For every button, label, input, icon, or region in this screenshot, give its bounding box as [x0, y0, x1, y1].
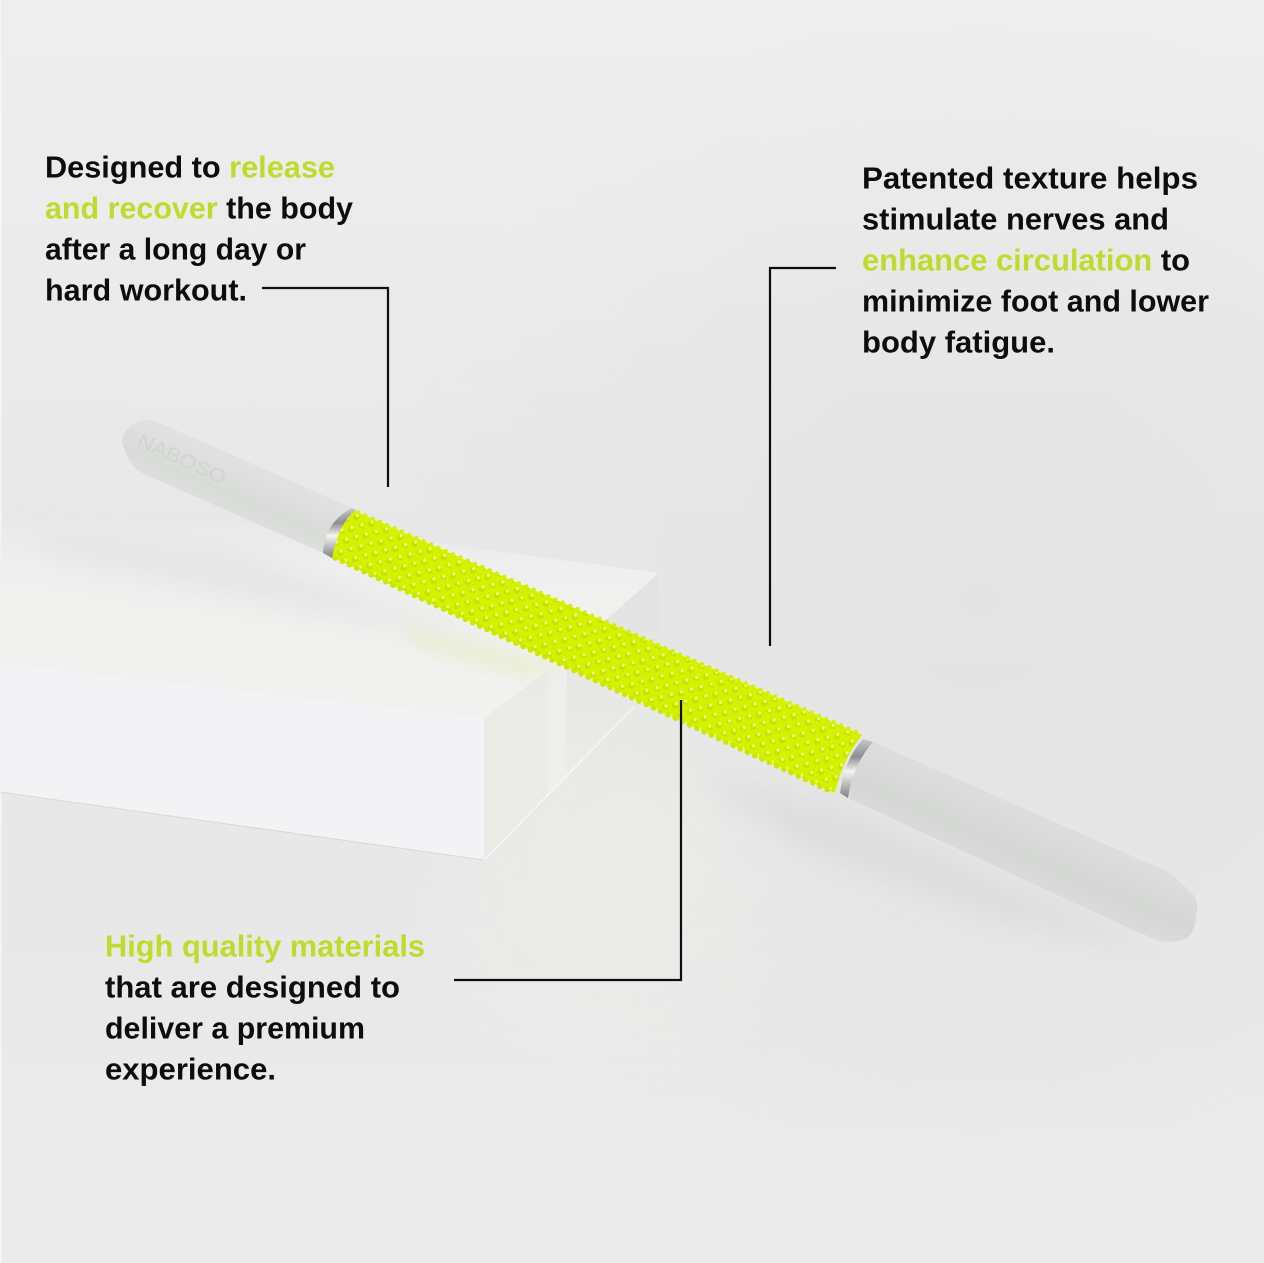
text block: high quality materials: deliver a premium	[105, 1010, 365, 1046]
left grip	[122, 420, 352, 553]
callout line: patented texture	[770, 268, 836, 646]
text block: patented texture: minimize foot and lower	[862, 284, 1209, 318]
roller	[122, 420, 1197, 942]
left ring	[323, 508, 356, 558]
text block: release and recover: Designed to release	[45, 150, 335, 184]
text block: high quality materials: experience.	[105, 1052, 276, 1086]
text block: patented texture: enhance circulation to	[862, 242, 1190, 278]
right ring	[840, 739, 873, 798]
text block: patented texture: Patented texture helps	[862, 160, 1198, 196]
text block: high quality materials	[105, 928, 425, 1086]
text block: high quality materials: that are designed to	[105, 970, 400, 1004]
shadows of the roller	[20, 535, 1180, 955]
text block: patented texture: stimulate nerves and	[862, 202, 1169, 236]
right grip	[848, 742, 1197, 942]
text block: release and recover: hard workout.	[45, 272, 247, 308]
text block: release and recover	[45, 150, 354, 308]
brand mark: NABOSO	[134, 430, 229, 489]
block: white pedestal	[0, 515, 659, 860]
text block: release and recover: after a long day or	[45, 232, 306, 266]
text block: high quality materials: High quality materials	[105, 928, 425, 964]
callout line: release and recover	[262, 288, 388, 487]
text block: patented texture	[862, 160, 1209, 360]
callout line: high quality materials	[454, 700, 681, 980]
textured green section	[328, 509, 862, 793]
text block: release and recover: and recover the body	[45, 190, 354, 226]
text block: patented texture: body fatigue.	[862, 324, 1055, 360]
